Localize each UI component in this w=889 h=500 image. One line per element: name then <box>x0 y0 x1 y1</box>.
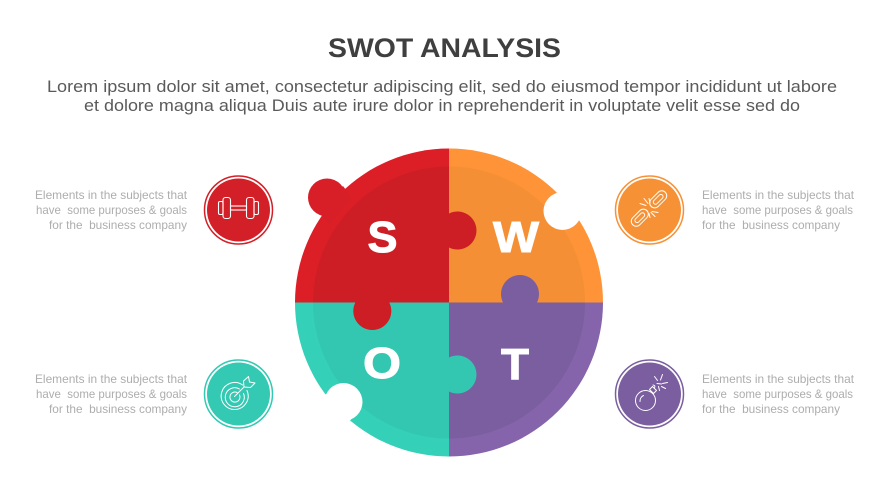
text block: opportunities <box>35 372 188 416</box>
icon badge: dumbbell <box>204 176 272 244</box>
puzzle notch: white top right <box>544 183 590 230</box>
text block: threats: Elements in the subjects that <box>702 372 855 386</box>
text block: strengths <box>35 188 188 232</box>
puzzle notch: white bottom left <box>314 383 362 431</box>
puzzle knob: red right <box>449 212 476 249</box>
text block: weaknesses <box>702 188 855 232</box>
panel: opportunities quadrant <box>295 302 449 456</box>
title: SWOT ANALYSIS <box>328 33 561 63</box>
puzzle knob: red bottom <box>353 302 391 330</box>
text block: threats: for the business company <box>702 402 840 416</box>
puzzle knob: purple top <box>501 275 539 302</box>
panel: weaknesses quadrant <box>449 148 603 302</box>
icon badge: broken chain <box>616 176 684 244</box>
letter W: W <box>493 213 540 262</box>
icon badge: bomb <box>616 360 684 428</box>
letter T: T <box>501 340 529 389</box>
subtitle text block: Lorem ipsum dolor sit amet, consectetur adipiscing elit, sed do eiusmod tempor incididunt ut labore <box>47 78 837 96</box>
puzzle circle <box>295 148 603 456</box>
subtitle text block: et dolore magna aliqua Duis aute irure dolor in reprehenderit in voluptate velit esse sed do <box>84 97 800 115</box>
text block: threats: have some purposes & goals <box>702 387 853 401</box>
subtitle text block <box>47 78 837 115</box>
icon badge: target <box>204 360 272 428</box>
letter O: O <box>363 339 401 388</box>
puzzle knob: teal right <box>449 356 476 393</box>
text block: strengths: Elements in the subjects that <box>35 188 188 202</box>
text block: strengths: for the business company <box>49 218 187 232</box>
text block: weaknesses: have some purposes & goals <box>702 203 853 217</box>
text block: opportunities: for the business company <box>49 402 187 416</box>
text block: weaknesses: Elements in the subjects that <box>702 188 855 202</box>
text block: opportunities: have some purposes & goals <box>36 387 187 401</box>
panel: strengths quadrant <box>295 148 449 302</box>
panel: threats quadrant <box>449 302 603 456</box>
text block: strengths: have some purposes & goals <box>36 203 187 217</box>
text block: weaknesses: for the business company <box>702 218 840 232</box>
letter S: S <box>368 213 398 262</box>
text block: opportunities: Elements in the subjects that <box>35 372 188 386</box>
puzzle knob: red top left <box>308 178 352 224</box>
text block: threats <box>702 372 855 416</box>
